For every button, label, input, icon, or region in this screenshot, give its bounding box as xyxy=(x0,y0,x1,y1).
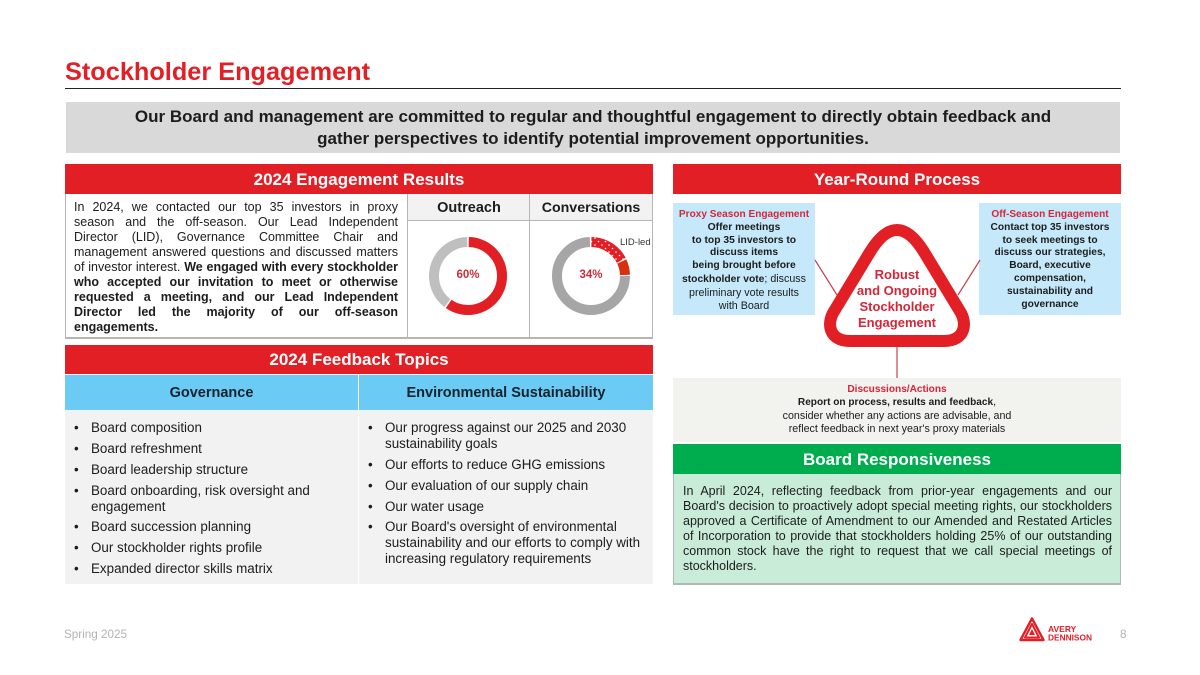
callout: off-season engagement: Off-Season Engagement xyxy=(991,209,1109,220)
list: environmental sustainability topics: increasing regulatory requirements xyxy=(385,551,591,566)
text block: results summary: of investor interest. We engaged with every stockholder xyxy=(74,260,398,274)
list: governance topics: Board composition xyxy=(91,420,202,435)
chart: conversations donut xyxy=(552,237,651,315)
panel: 2024 feedback topics xyxy=(65,345,653,584)
callout: discussions and actions: consider whether any actions are advisable, and xyxy=(783,410,1011,422)
callout: proxy season engagement: Proxy Season Engagement xyxy=(679,209,809,220)
text block: results summary: Director (LID), Governance Committee Chair and xyxy=(74,230,398,244)
heading: feedback topics xyxy=(65,345,653,374)
list: environmental sustainability topics: Our progress against our 2025 and 2030 xyxy=(385,420,626,435)
heading: year-round process: Year-Round Process xyxy=(814,170,980,189)
list: governance topics: engagement xyxy=(91,499,165,514)
list: environmental sustainability topics: • xyxy=(368,478,373,493)
list: governance topics: Our stockholder rights profile xyxy=(91,540,262,555)
heading: engagement results: 2024 Engagement Results xyxy=(254,170,464,189)
heading: board responsiveness xyxy=(673,444,1121,474)
list: governance topics: Board onboarding, risk oversight and xyxy=(91,483,310,498)
intro banner: Our Board and management are committed to regular and thoughtful engagement to directly obtain feedback and xyxy=(135,107,1051,126)
chart: conversations donut: 34% xyxy=(579,269,603,281)
list: environmental sustainability topics: • xyxy=(368,519,373,534)
text block: responsiveness summary: stockholders. xyxy=(683,559,757,573)
chart: outreach donut: 60% xyxy=(456,269,480,281)
list: environmental sustainability topics: • xyxy=(368,420,373,435)
list: governance topics: • xyxy=(74,519,79,534)
text block: responsiveness summary: common stock have the right to request that we call special meetings of xyxy=(683,544,1112,558)
text block: results summary: season and the off-season. Our Lead Independent xyxy=(74,215,398,229)
callout: proxy season engagement: Offer meetings xyxy=(708,222,780,233)
callout: proxy season engagement: preliminary vote results xyxy=(689,287,799,299)
intro banner xyxy=(66,102,1120,153)
list: governance topics xyxy=(74,420,310,576)
callout: off-season engagement: discuss our strategies, xyxy=(994,247,1105,258)
callout: proxy season engagement: being brought before xyxy=(692,260,796,271)
list: environmental sustainability topics: Our water usage xyxy=(385,499,484,514)
callout: proxy season engagement: discuss items xyxy=(710,247,778,258)
icon: company logo: AVERY xyxy=(1048,624,1077,634)
panel: board responsiveness xyxy=(673,444,1121,585)
callout: discussions and actions: Discussions/Actions xyxy=(847,384,947,394)
list: governance topics: • xyxy=(74,561,79,576)
heading: board responsiveness: Board Responsiveness xyxy=(803,450,991,469)
callout: off-season engagement: to seek meetings to xyxy=(1002,235,1098,246)
column header: governance xyxy=(65,375,358,410)
list: environmental sustainability topics: sustainability goals xyxy=(385,436,497,451)
list: governance topics: Board succession planning xyxy=(91,519,251,534)
list: environmental sustainability topics: • xyxy=(368,499,373,514)
callout: discussions and actions: reflect feedback in next year's proxy materials xyxy=(789,423,1005,435)
list: governance topics: Board refreshment xyxy=(91,441,202,456)
callout: proxy season engagement: with Board xyxy=(719,300,769,312)
text block: results summary: who accepted our invitation to meet or otherwise xyxy=(74,275,398,289)
heading: year-round process xyxy=(673,164,1121,194)
table header: outreach: Outreach xyxy=(437,200,501,216)
callout: proxy season engagement xyxy=(673,203,815,315)
callout: off-season engagement: governance xyxy=(1021,299,1079,310)
list: governance topics: Expanded director skills matrix xyxy=(91,561,273,576)
callout: discussions and actions xyxy=(673,378,1121,442)
list: governance topics: Board leadership structure xyxy=(91,462,248,477)
icon: company logo: DENNISON xyxy=(1048,632,1092,642)
diagram: engagement triangle with connectors: Engagement xyxy=(858,315,937,330)
list: environmental sustainability topics: • xyxy=(368,457,373,472)
list: governance topics: • xyxy=(74,420,79,435)
title: Stockholder Engagement xyxy=(65,58,370,86)
list: environmental sustainability topics: Our efforts to reduce GHG emissions xyxy=(385,457,605,472)
callout: proxy season engagement: to top 35 investors to xyxy=(692,235,796,246)
text block: results summary: engagements. xyxy=(74,320,158,334)
list: governance topics: • xyxy=(74,462,79,477)
intro banner: gather perspectives to identify potential improvement opportunities. xyxy=(317,129,869,148)
text block: results summary xyxy=(74,200,398,334)
text block: responsiveness summary: of Incorporation to provide that stockholders holding 25% of our outstanding xyxy=(683,529,1112,543)
text block: results summary: management answered questions and discussed matters xyxy=(74,245,398,259)
list: governance topics: • xyxy=(74,483,79,498)
diagram: engagement triangle with connectors: Robust xyxy=(875,267,920,282)
table header: outreach xyxy=(407,194,530,221)
text block: responsiveness summary: approved a Certificate of Amendment to our Amended and Restated Articles xyxy=(683,514,1112,528)
list: governance topics: • xyxy=(74,441,79,456)
list: environmental sustainability topics: Our Board's oversight of environmental xyxy=(385,519,617,534)
icon: company logo xyxy=(1019,617,1092,642)
diagram: engagement triangle with connectors: Stockholder xyxy=(859,299,935,314)
panel: 2024 engagement results xyxy=(65,164,653,339)
text block: responsiveness summary xyxy=(683,484,1112,573)
callout: off-season engagement: Contact top 35 investors xyxy=(991,222,1109,233)
callout: off-season engagement: sustainability and xyxy=(1007,286,1093,297)
heading: engagement results xyxy=(65,164,653,194)
list: environmental sustainability topics: Our evaluation of our supply chain xyxy=(385,478,588,493)
text block: results summary: In 2024, we contacted our top 35 investors in proxy xyxy=(74,200,398,214)
column header: environmental sustainability xyxy=(359,375,653,410)
callout: off-season engagement: Board, executive xyxy=(1009,260,1091,271)
table header: conversations: Conversations xyxy=(542,200,640,216)
diagram: engagement triangle with connectors xyxy=(814,224,980,378)
list: environmental sustainability topics xyxy=(368,420,640,566)
frame xyxy=(65,194,653,339)
column header: environmental sustainability: Environmental Sustainability xyxy=(406,385,606,401)
page number: 8 xyxy=(1120,628,1127,641)
text block: results summary: Director led the majority of our off-season xyxy=(74,305,398,319)
callout: discussions and actions: Report on process, results and feedback, xyxy=(798,396,996,408)
chart: conversations donut: LID-led xyxy=(620,237,651,248)
text block: results summary: requested a meeting, and our Lead Independent xyxy=(74,290,398,304)
callout: off-season engagement xyxy=(979,203,1121,315)
footer date: Spring 2025 xyxy=(64,628,127,641)
table header: conversations xyxy=(529,194,652,221)
list: environmental sustainability topics: sustainability and our efforts to comply with xyxy=(385,535,640,550)
column header: governance: Governance xyxy=(170,385,253,401)
list: governance topics: • xyxy=(74,540,79,555)
heading: feedback topics: 2024 Feedback Topics xyxy=(269,350,449,369)
callout: proxy season engagement: stockholder vote; discuss xyxy=(682,273,806,285)
text block: responsiveness summary: In April 2024, reflecting feedback from prior-year engagements and our xyxy=(683,484,1112,498)
chart: outreach donut xyxy=(429,237,507,315)
callout: off-season engagement: compensation, xyxy=(1014,273,1086,284)
text block: responsiveness summary: Board's decision to proactively adopt special meeting rights, our stockholders xyxy=(683,499,1112,513)
diagram: engagement triangle with connectors: and Ongoing xyxy=(857,283,937,298)
